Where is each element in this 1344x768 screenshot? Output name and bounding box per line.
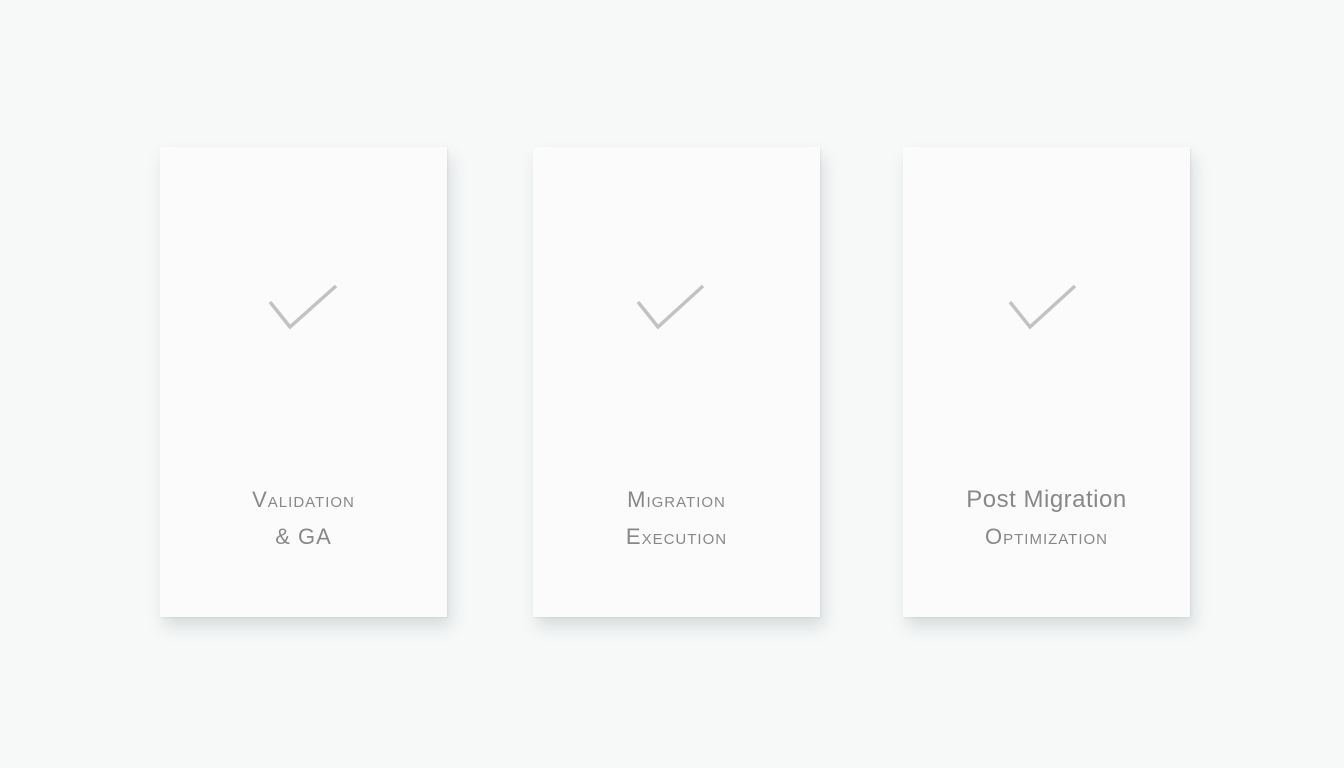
icon: checkmark [636, 284, 704, 330]
card: validation & QA [160, 147, 447, 617]
label: Post Migration [966, 486, 1127, 513]
label [966, 486, 1127, 549]
icon: checkmark [1008, 284, 1076, 330]
label [252, 487, 355, 549]
label: Optimization [985, 524, 1108, 549]
label: Migration [627, 487, 726, 512]
label [626, 487, 727, 549]
label: Execution [626, 524, 727, 549]
card: post migration optimization [903, 147, 1190, 617]
label: & GA [275, 524, 332, 549]
card: migration execution [533, 147, 820, 617]
label: Validation [252, 487, 355, 512]
icon: checkmark [268, 284, 337, 330]
